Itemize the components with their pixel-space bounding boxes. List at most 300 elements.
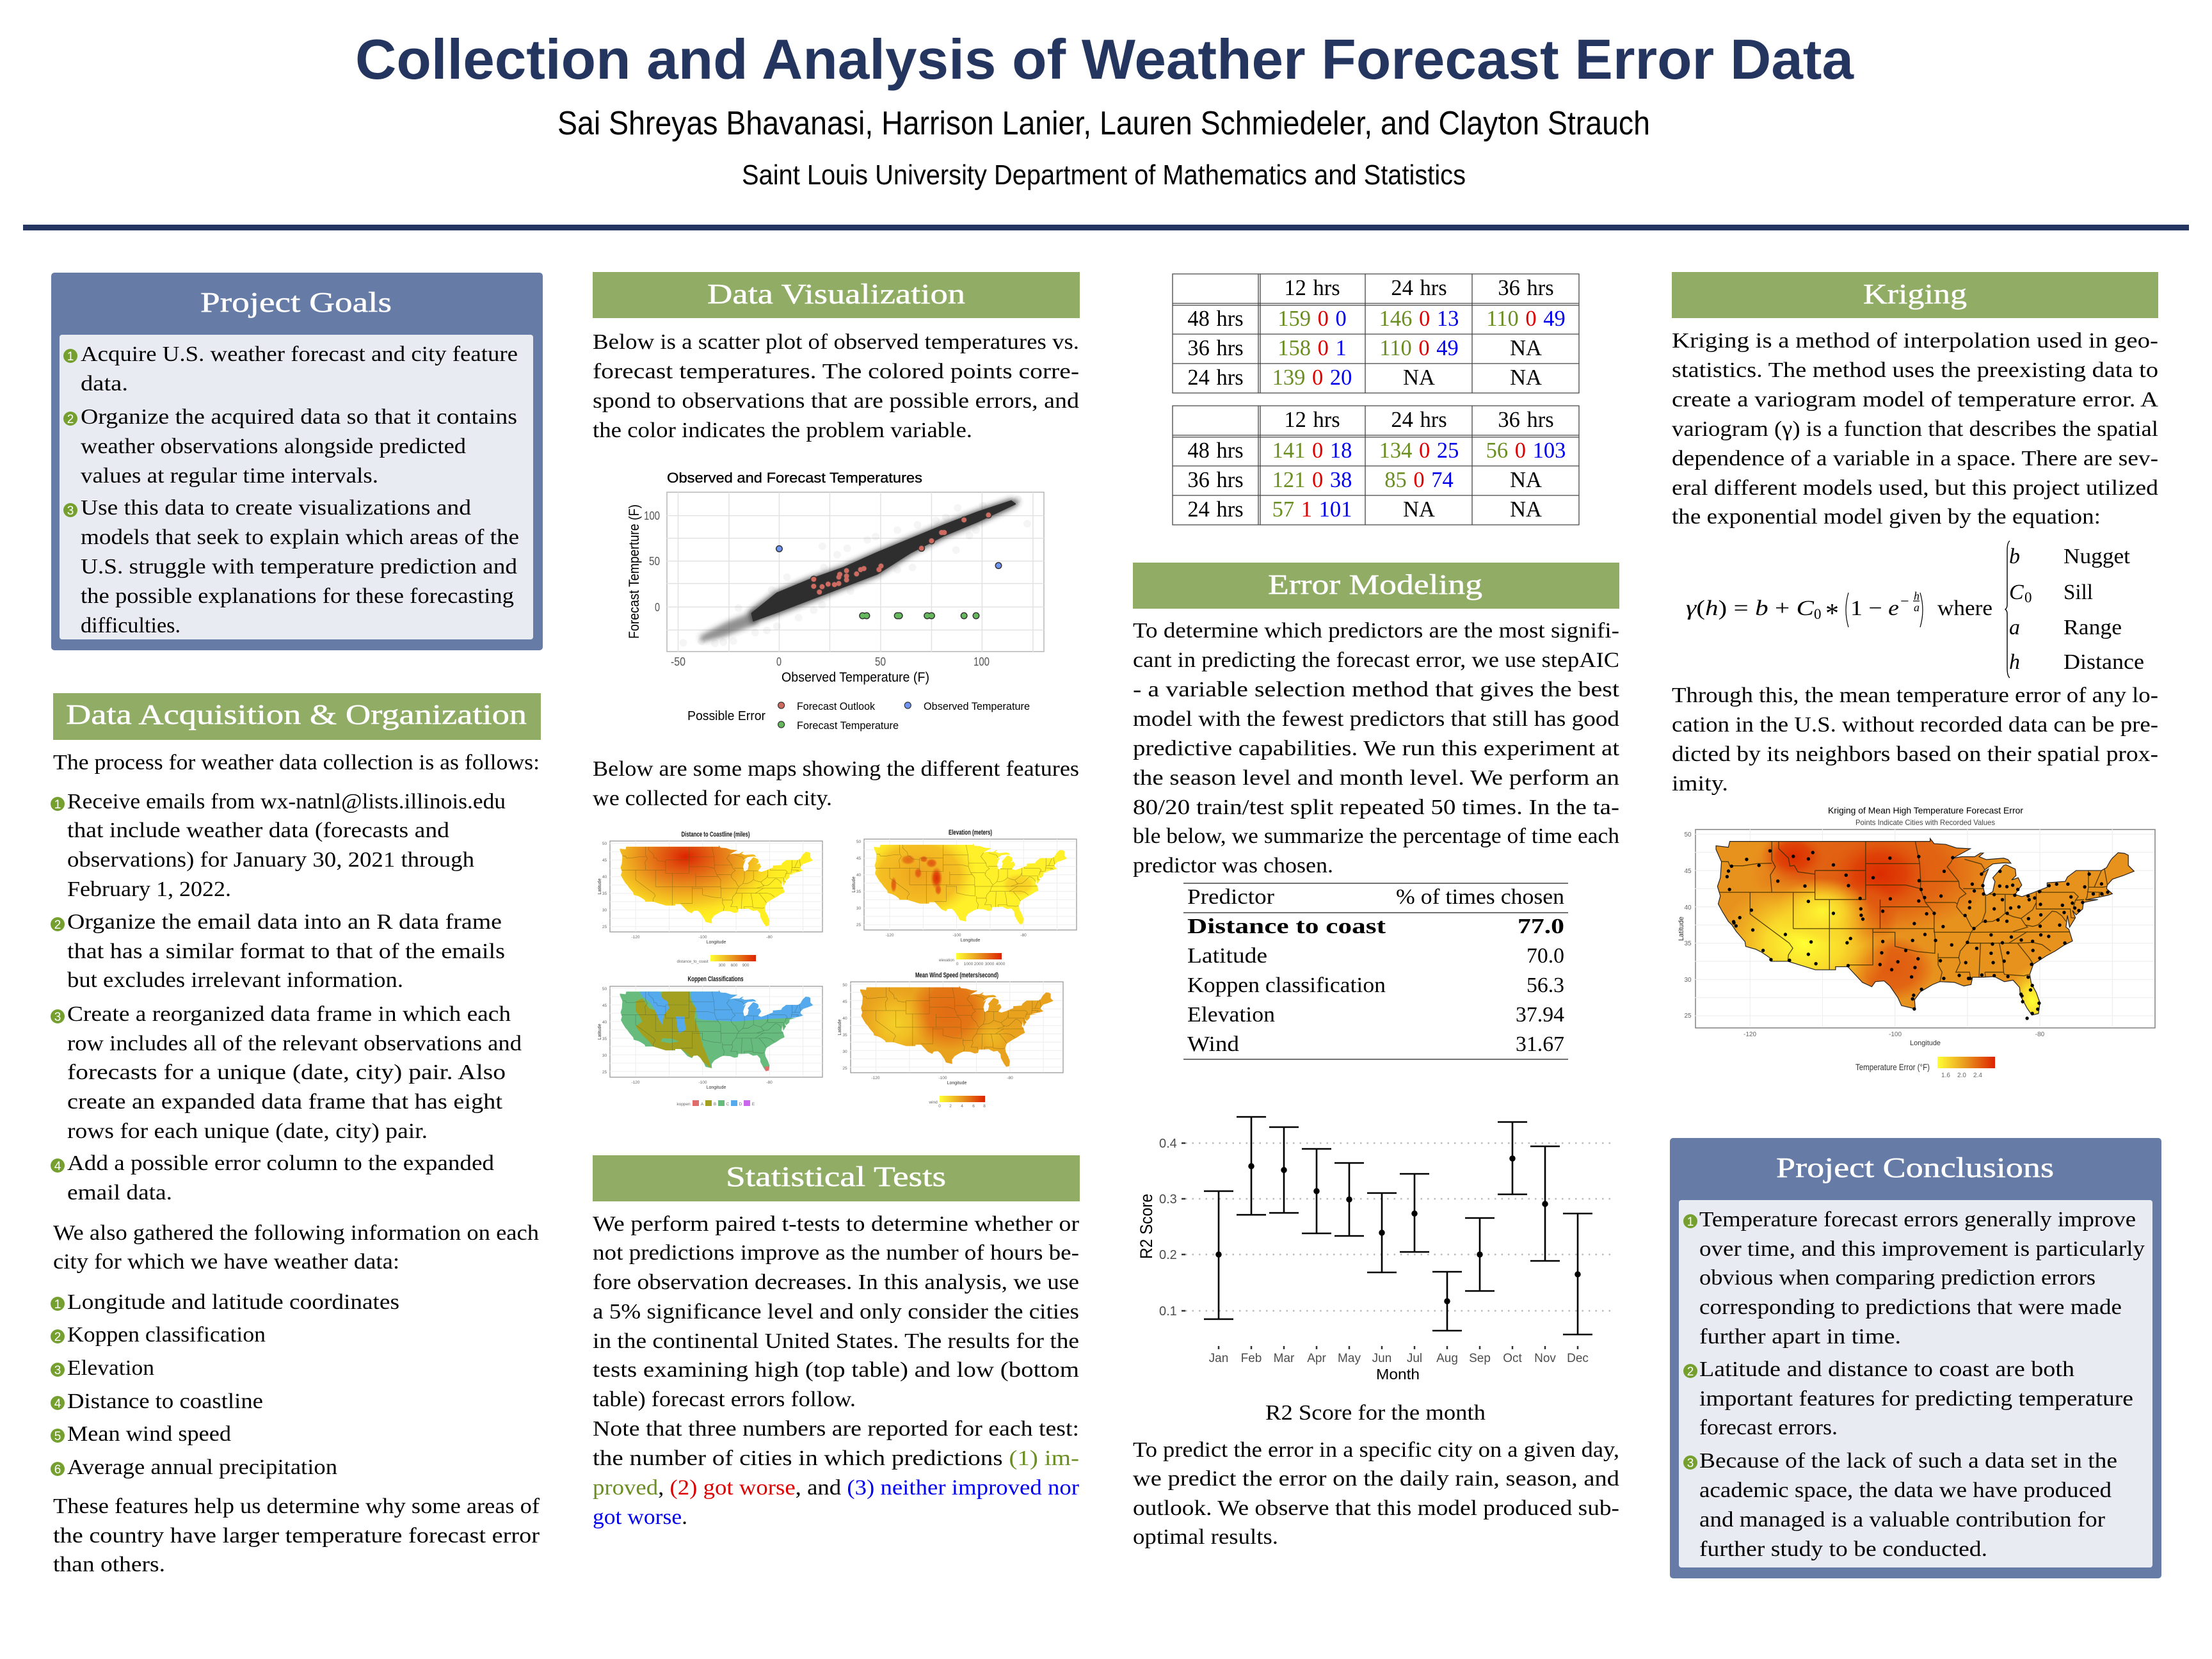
equation: exponential variogram: * (1825, 599, 1839, 629)
text: goals list: the possible explanations for these forecasting (81, 584, 514, 608)
text: goals list: Acquire U.S. weather forecast and city feature (81, 342, 518, 366)
month labels: Jun (1372, 1352, 1391, 1365)
map: elevation: -100 (952, 933, 961, 938)
map: mean wind speed: 2 (949, 1104, 952, 1109)
icon: conclusion bullets: 3 (1687, 1457, 1694, 1470)
text: maps intro: we collected for each city. (593, 787, 832, 810)
map: distance to coastline: 25 (602, 925, 607, 929)
map: Koppen classifications: Longitude (707, 1086, 726, 1090)
map: elevation: elevation (939, 958, 954, 963)
text: stepAIC description: model with the fewest predictors that still has good (1133, 707, 1619, 731)
chart: observed vs forecast scatter (626, 470, 1044, 732)
text: city information intro (53, 1221, 539, 1274)
equation: exponential variogram (1686, 541, 2144, 678)
authors: Sai Shreyas Bhavanasi, Harrison Lanier, Lauren Schmiedeler, and Clayton Strauch (557, 105, 1650, 142)
axis labels: 45 (1684, 868, 1692, 875)
table: low forecast error tests: NA (1510, 497, 1542, 522)
map: distance to coastline: Longitude (707, 940, 726, 945)
text: test description: table) forecast errors follow. (593, 1388, 856, 1411)
x axis label: Observed Temperature (F) (781, 670, 929, 685)
table: predictor selection percentages: 37.94 (1516, 1003, 1564, 1027)
text: stepAIC description: 80/20 train/test split repeated 50 times. In the ta- (1133, 796, 1619, 819)
text: goals list: data. (81, 372, 128, 396)
table: low forecast error tests: 12 hrs (1284, 408, 1340, 432)
map: distance to coastline: 30 (602, 908, 607, 913)
panel: Project Conclusions (1670, 1138, 2161, 1578)
heading bar: Data Acquisition & Organization (66, 699, 527, 730)
axis tick labels: 50 (649, 555, 660, 568)
brace and definitions: b (2009, 545, 2020, 568)
title: Collection and Analysis of Weather Forecast Error Data (355, 28, 1854, 91)
text: kriging use: imity. (1672, 772, 1728, 796)
text: conclusions list: obvious when comparing prediction errors (1699, 1266, 2096, 1290)
brace and definitions: Nugget (2064, 545, 2131, 568)
text: conclusions list: Because of the lack of such a data set in the (1699, 1449, 2117, 1473)
text: process list: Receive emails from wx-natnl@lists.illinois.edu (67, 790, 506, 813)
text: process list: forecasts for a unique (date, city) pair. Also (67, 1061, 506, 1084)
brace and definitions (2005, 541, 2144, 678)
icon: bullets for feature list (51, 1297, 65, 1477)
panel: Data Visualization (586, 272, 1080, 1109)
text: conclusions list: important features for predicting temperature (1699, 1387, 2133, 1411)
text: kriging description: eral different models used, but this project utilized (1672, 476, 2158, 500)
map: mean wind speed: 35 (842, 1033, 847, 1038)
text: conclusions list: further study to be conducted. (1699, 1537, 1987, 1561)
text: goals list: U.S. struggle with temperature prediction and (81, 555, 517, 579)
text: goals list: models that seek to explain which areas of the (81, 525, 519, 549)
map: mean wind speed: 4 (961, 1104, 963, 1109)
equation: exponential variogram: h (1914, 589, 1919, 602)
text: kriging use: Through this, the mean temperature error of any lo- (1672, 684, 2158, 707)
legend: temperature error: 2.0 (1957, 1072, 1966, 1079)
icon: bullets for feature list: 1 (54, 1298, 61, 1311)
axis labels: -80 (2035, 1031, 2045, 1038)
text: stepAIC description: - a variable selection method that gives the best (1133, 678, 1620, 701)
map: distance to coastline: -80 (766, 935, 773, 940)
legend (687, 700, 1030, 732)
axis tick labels: 50 (875, 655, 886, 668)
month labels: Aug (1436, 1352, 1458, 1365)
map: elevation: 40 (856, 873, 861, 878)
brace and definitions: Sill (2064, 581, 2093, 604)
table: low forecast error tests: 141 0 18 (1272, 438, 1352, 463)
icon: bullets for feature list: 3 (54, 1364, 61, 1377)
text: test description: fore observation decreases. In this analysis, we use (593, 1270, 1079, 1294)
axis tick labels: 0 (776, 655, 781, 668)
text: conclusions list: Latitude and distance to coast are both (1699, 1358, 2074, 1381)
text: scatter intro: forecast temperatures. The colored points corre- (593, 360, 1079, 383)
map: distance to coastline: 35 (602, 892, 607, 896)
text: stepAIC description (1133, 619, 1620, 878)
text: conclusions list: academic space, the data we have produced (1699, 1479, 2112, 1502)
heading bar: Statistical Tests (726, 1161, 946, 1192)
icon: conclusion bullets (1683, 1214, 1697, 1470)
legend: Koppen classes: B (714, 1102, 716, 1107)
table: predictor selection percentages: Predictor (1187, 885, 1275, 909)
table: high forecast error tests: 159 0 0 (1278, 307, 1347, 331)
map: elevation: 4000 (996, 962, 1006, 966)
table: high forecast error tests: 146 0 13 (1379, 307, 1459, 331)
table: predictor selection percentages: Latitude (1187, 944, 1267, 968)
map: Koppen classifications: -80 (766, 1080, 773, 1085)
panel: Kriging (1672, 272, 2159, 1079)
legend: Koppen classes: C (726, 1102, 730, 1107)
text: goals list: difficulties. (81, 614, 180, 637)
text: city information intro: city for which we have weather data: (53, 1250, 399, 1274)
map: distance to coastline: Latitude (598, 878, 602, 894)
text: stepAIC description: To determine which predictors are the most signifi- (1133, 619, 1619, 643)
panel: Data Acquisition & Organization (51, 693, 541, 1576)
table: low forecast error tests: 134 0 25 (1379, 438, 1459, 463)
text: process list: February 1, 2022. (67, 878, 231, 901)
text: process list: row includes all of the relevant observations and (67, 1032, 522, 1055)
table: low forecast error tests: 36 hrs (1187, 468, 1244, 492)
axis labels: 30 (1684, 977, 1692, 984)
table: low forecast error tests: 24 hrs (1391, 408, 1447, 432)
map: mean wind speed: 6 (972, 1104, 975, 1109)
axis labels: -120 (1743, 1031, 1756, 1038)
text: conclusions list (1699, 1208, 2145, 1561)
heading bar: Kriging (1863, 278, 1967, 310)
text: maps intro (593, 757, 1079, 810)
table: predictor selection percentages: % of times chosen (1396, 885, 1564, 909)
equation: exponential variogram: 0 (1814, 606, 1822, 622)
map: elevation: 25 (856, 923, 861, 927)
equation: exponential variogram: where (1937, 597, 1992, 620)
text: stepAIC description: predictor was chosen. (1133, 854, 1333, 878)
text: process list (67, 790, 522, 1205)
y tick labels: 0.4 (1159, 1137, 1177, 1151)
table: low forecast error tests: 36 hrs (1498, 408, 1554, 432)
text: scatter intro (593, 330, 1079, 442)
map: Koppen classifications: 40 (602, 1020, 607, 1025)
map: elevation: Elevation (meters) (949, 829, 992, 837)
map: Koppen classifications: -120 (631, 1080, 640, 1085)
table: low forecast error tests: 57 1 101 (1272, 497, 1352, 522)
table: high forecast error tests: 110 0 49 (1486, 307, 1566, 331)
panel: Project Goals (51, 273, 543, 650)
text: closing note: than others. (53, 1553, 165, 1576)
y tick labels: 0.1 (1159, 1304, 1177, 1318)
icon: bullets for feature list: 2 (54, 1331, 61, 1344)
icon: bullet 1: 1 (67, 350, 74, 364)
text: feature list: Longitude and latitude coordinates (67, 1290, 399, 1314)
text: kriging use: dicted by its neighbors based on their spatial prox- (1672, 742, 2158, 766)
text: daily prediction note: optimal results. (1133, 1525, 1278, 1549)
icon: bullet 1 (63, 349, 77, 364)
axis labels: 25 (1684, 1013, 1692, 1020)
map: distance to coastline: distance_to_coast (677, 959, 709, 964)
text: colored number key: the number of cities in which predictions (1) im- (593, 1447, 1079, 1470)
text: kriging use: cation in the U.S. without recorded data can be pre- (1672, 713, 2158, 737)
legend: temperature error: 2.4 (1973, 1072, 1982, 1079)
text: conclusions list: forecast errors. (1699, 1416, 1838, 1439)
text: feature list: Mean wind speed (67, 1422, 231, 1446)
text: daily prediction note: outlook. We observe that this model produced sub- (1133, 1496, 1619, 1520)
header rule (23, 225, 2189, 230)
affiliation: Saint Louis University Department of Mathematics and Statistics (742, 159, 1466, 191)
table: high forecast error tests: NA (1510, 365, 1542, 390)
map: elevation (852, 829, 1077, 966)
axis labels: 40 (1684, 904, 1692, 911)
axis labels: Longitude (1910, 1039, 1941, 1047)
table: predictor selection percentages: 77.0 (1518, 915, 1564, 938)
map: mean wind speed: 40 (842, 1016, 847, 1021)
text: kriging description: the exponential model given by the equation: (1672, 505, 2101, 529)
table: predictor selection percentages: 70.0 (1527, 944, 1564, 968)
map: Koppen classifications: 50 (602, 987, 607, 991)
text: test description: a 5% significance level and only consider the cities (593, 1300, 1079, 1324)
axis labels (1678, 831, 2045, 1047)
text: colored number key: Note that three numbers are reported for each test: (593, 1417, 1079, 1441)
text: conclusions list: over time, and this improvement is particularly (1699, 1237, 2145, 1261)
map: distance to coastline: 40 (602, 875, 607, 879)
map: mean wind speed: 0 (938, 1104, 941, 1109)
text: conclusions list: further apart in time. (1699, 1325, 1901, 1349)
table: high forecast error tests: 24 hrs (1187, 365, 1244, 390)
month labels: Mar (1274, 1352, 1295, 1365)
map: mean wind speed: Longitude (947, 1081, 966, 1086)
table: low forecast error tests: 56 0 103 (1486, 438, 1566, 463)
axis tick labels: -50 (671, 655, 685, 668)
equation: exponential variogram: − (1900, 593, 1909, 610)
map: kriging of mean high temperature forecast error: Points Indicate Cities with Recorded Values (1855, 818, 1995, 827)
y axis label: R2 Score (1137, 1194, 1156, 1259)
map: distance to coastline: 300 (719, 963, 726, 968)
table: predictor selection percentages: 31.67 (1516, 1032, 1564, 1056)
table: high forecast error tests: NA (1510, 336, 1542, 360)
icon: bullets for process list: 1 (54, 798, 61, 812)
map: mean wind speed: 8 (983, 1104, 986, 1109)
table: high forecast error tests: NA (1403, 365, 1435, 390)
map: Koppen classifications: 30 (602, 1054, 607, 1058)
legend: Koppen classes: E (752, 1102, 755, 1107)
text: stepAIC description: predictive capabilities. We run this experiment at (1133, 737, 1620, 760)
text: test description: in the continental United States. The results for the (593, 1329, 1079, 1353)
map: mean wind speed: 50 (842, 983, 847, 988)
panel: Error Modeling (1133, 563, 1620, 1549)
map: elevation: 50 (856, 840, 861, 844)
caption: R2 score: R2 Score for the month (1265, 1401, 1486, 1425)
legend: Possible Error (687, 709, 765, 723)
text: daily prediction note: To predict the error in a specific city on a given day, (1133, 1438, 1619, 1462)
map: mean wind speed: Mean Wind Speed (meters/second) (915, 972, 998, 979)
axis labels: 35 (1684, 940, 1692, 947)
legend: temperature error (1855, 1057, 1995, 1079)
table: predictor selection percentages (1183, 883, 1568, 1059)
text: daily prediction note: we predict the error on the daily rain, season, and (1133, 1467, 1619, 1491)
map: distance to coastline: Distance to Coastline (miles) (681, 831, 750, 838)
table: high forecast error tests: 158 0 1 (1278, 336, 1347, 360)
brace and definitions: Range (2064, 616, 2122, 639)
icon: bullet 3: 3 (67, 504, 74, 518)
map: elevation: 35 (856, 890, 861, 894)
map: Koppen classifications: Latitude (598, 1023, 602, 1039)
text: city information intro: We also gathered the following information on each (53, 1221, 539, 1245)
table: high forecast error tests: 24 hrs (1391, 276, 1447, 300)
map: kriging of mean high temperature forecast error (1678, 805, 2156, 1079)
table: high forecast error tests: 36 hrs (1187, 336, 1244, 360)
text: goals list: weather observations alongside predicted (81, 435, 466, 458)
heading bar: Data Visualization (707, 278, 965, 310)
icon: bullet 3 (63, 503, 77, 518)
text: maps intro: Below are some maps showing the different features (593, 757, 1079, 781)
axis labels: -100 (1889, 1031, 1902, 1038)
text: kriging description: dependence of a variable in a space. There are sev- (1672, 447, 2158, 470)
map: mean wind speed: -120 (871, 1076, 880, 1080)
axis tick labels: 100 (644, 509, 660, 522)
brace and definitions: 0 (2024, 589, 2032, 605)
map: Koppen classifications: 25 (602, 1070, 607, 1075)
map: Koppen classifications: 35 (602, 1037, 607, 1041)
text: kriging description: Kriging is a method of interpolation used in geo- (1672, 329, 2158, 353)
table: predictor selection percentages: Distance to coast (1187, 915, 1386, 938)
map: Koppen classifications: 45 (602, 1004, 607, 1008)
text: conclusions list: corresponding to predictions that were made (1699, 1295, 2122, 1319)
icon: bullet 2 (63, 412, 77, 426)
map: mean wind speed: 25 (842, 1066, 847, 1071)
header: poster title block (23, 28, 2189, 230)
table: low forecast error tests: 48 hrs (1187, 438, 1244, 463)
chart: R2 score by month (1137, 1117, 1612, 1382)
table: high forecast error tests: 36 hrs (1498, 276, 1554, 300)
y axis label: Forecast Temperture (F) (626, 504, 642, 639)
map: elevation: 45 (856, 856, 861, 861)
map: elevation: 3000 (985, 962, 995, 966)
text: feature list: Distance to coastline (67, 1390, 263, 1413)
table: predictor selection percentages: 56.3 (1527, 974, 1564, 997)
heading bar: Error Modeling (1268, 569, 1482, 600)
month labels (1209, 1352, 1589, 1365)
table: high forecast error tests: 139 0 20 (1272, 365, 1352, 390)
map: mean wind speed: Latitude (838, 1019, 842, 1035)
chart title: Observed and Forecast Temperatures (667, 470, 922, 486)
heading bar (1133, 563, 1619, 609)
icon: bullets for process list: 4 (54, 1160, 61, 1173)
table: high forecast error tests: 48 hrs (1187, 307, 1244, 331)
legend: Koppen classes: A (701, 1102, 704, 1107)
map: mean wind speed: wind (928, 1100, 938, 1105)
text: process intro: The process for weather data collection is as follows: (53, 751, 540, 774)
icon: bullets for feature list: 6 (54, 1463, 61, 1477)
table: predictor selection percentages: Wind (1187, 1032, 1239, 1056)
map: mean wind speed: -100 (938, 1076, 947, 1080)
map: kriging of mean high temperature forecast error: Kriging of Mean High Temperature Forecast Error (1828, 805, 2023, 815)
map: mean wind speed: 30 (842, 1050, 847, 1054)
text: scatter intro: Below is a scatter plot of observed temperatures vs. (593, 330, 1079, 354)
text: test description: We perform paired t-tests to determine whether or (593, 1212, 1080, 1236)
text: kriging description: variogram (γ) is a function that describes the spatial (1672, 417, 2158, 441)
table: low forecast error tests: NA (1510, 468, 1542, 492)
map: mean wind speed (838, 970, 1063, 1109)
equation: exponential variogram: γ(h) = b + C (1686, 597, 1814, 620)
text: test description: tests examining high (top table) and low (bottom (593, 1358, 1079, 1382)
text: stepAIC description: cant in predicting the forecast error, we use stepAIC (1133, 648, 1619, 672)
map: elevation: Longitude (961, 938, 980, 943)
heading: Project Goals: Project Goals (200, 287, 392, 318)
month labels: Oct (1503, 1352, 1522, 1365)
text: process list: Create a reorganized data frame in which each (67, 1002, 511, 1026)
text: stepAIC description: the season level and month level. We perform an (1133, 766, 1619, 790)
text: process list: rows for each unique (date, city) pair. (67, 1119, 428, 1143)
map: Koppen classifications: -100 (698, 1080, 707, 1085)
heading bar (53, 693, 541, 740)
text: goals list (81, 342, 519, 637)
icon: conclusion bullets: 2 (1687, 1365, 1694, 1379)
month labels: May (1338, 1352, 1361, 1365)
map: distance to coastline: 50 (602, 842, 607, 846)
table: low forecast error tests (1173, 406, 1579, 525)
table: predictor selection percentages: Elevation (1187, 1003, 1275, 1027)
text: process list: Organize the email data into an R data frame (67, 910, 502, 934)
map: elevation: -120 (885, 933, 894, 938)
legend: Forecast Outlook (797, 700, 875, 712)
map: distance to coastline: 900 (742, 963, 749, 968)
equation: exponential variogram: 1 − e (1850, 597, 1899, 620)
text: scatter intro: the color indicates the problem variable. (593, 419, 972, 442)
text: process list: create an expanded data frame that has eight (67, 1090, 503, 1114)
table: high forecast error tests (1173, 274, 1579, 393)
equation: exponential variogram: a (1914, 601, 1919, 614)
x axis label: Month (1376, 1366, 1420, 1382)
legend: Koppen classes: D (739, 1102, 742, 1107)
axis labels: 50 (1684, 831, 1692, 838)
text: colored number key: proved, (2) got worse , and (3) neither improved nor (593, 1476, 1080, 1500)
text: test description: not predictions improve as the number of hours be- (593, 1241, 1079, 1265)
y tick labels: 0.3 (1159, 1192, 1177, 1206)
text: colored number key: got worse. (593, 1505, 687, 1529)
table: high forecast error tests: 110 0 49 (1379, 336, 1459, 360)
month labels: Apr (1307, 1352, 1326, 1365)
text: conclusions list: and managed is a valuable contribution for (1699, 1508, 2106, 1532)
text: kriging description: statistics. The method uses the preexisting data to (1672, 358, 2158, 382)
legend: temperature error: Temperature Error (°F) (1855, 1062, 1930, 1072)
text: process list: that has a similar format to that of the emails (67, 940, 505, 963)
text: closing note: the country have larger temperature forecast error (53, 1524, 540, 1548)
text: closing note (53, 1495, 540, 1576)
axis tick labels: 100 (974, 655, 990, 668)
icon: bullets for process list (51, 797, 65, 1173)
map: distance to coastline: 600 (731, 963, 738, 968)
map: mean wind speed: 45 (842, 1000, 847, 1004)
map: elevation: -80 (1020, 933, 1027, 938)
text: kriging use (1672, 684, 2158, 796)
table: high forecast error tests: 12 hrs (1284, 276, 1340, 300)
text: process list: that include weather data (forecasts and (67, 819, 449, 842)
text: daily prediction note (1133, 1438, 1619, 1549)
month labels: Sep (1469, 1352, 1491, 1365)
brace and definitions: h (2009, 650, 2020, 674)
map: elevation: 0 (956, 962, 959, 966)
axis tick labels: 0 (655, 601, 660, 614)
y tick labels: 0.2 (1159, 1248, 1177, 1262)
brace and definitions: Distance (2064, 650, 2144, 674)
icon: bullets for process list: 2 (54, 918, 61, 932)
text: goals list: values at regular time intervals. (81, 464, 378, 488)
icon: bullets for feature list: 4 (54, 1397, 61, 1411)
month labels: Jul (1407, 1352, 1422, 1365)
text: feature list: Average annual precipitation (67, 1455, 337, 1479)
map: mean wind speed: -80 (1007, 1076, 1013, 1080)
table: low forecast error tests: 85 0 74 (1384, 468, 1454, 492)
y tick labels (1159, 1137, 1177, 1318)
text: process list: Add a possible error column to the expanded (67, 1151, 494, 1175)
text: conclusions list: Temperature forecast errors generally improve (1699, 1208, 2136, 1231)
legend: Observed Temperature (924, 700, 1030, 712)
text: process list: observations) for January 30, 2021 through (67, 848, 474, 872)
map: distance to coastline: 45 (602, 858, 607, 863)
text: process list: but excludes irrelevant information. (67, 968, 403, 992)
